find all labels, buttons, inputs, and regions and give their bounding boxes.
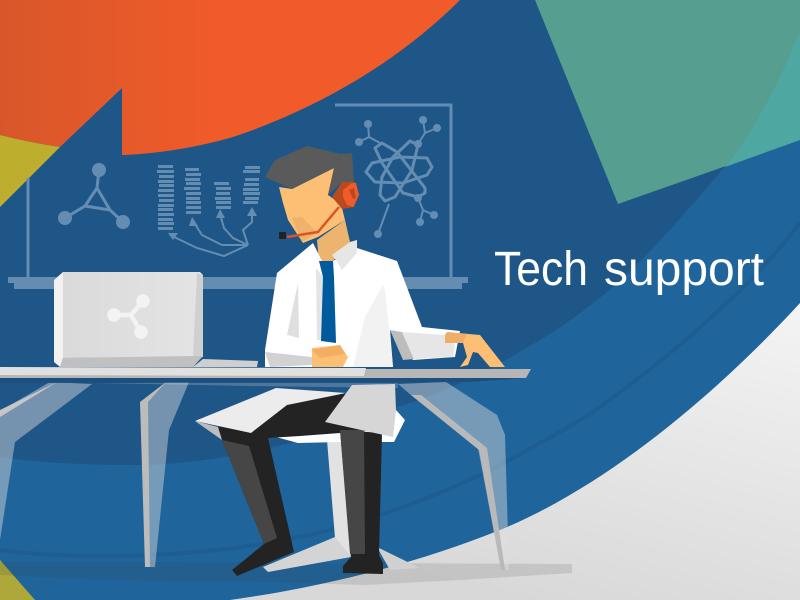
laptop lid (63, 272, 203, 358)
left glass leg (0, 382, 92, 540)
collar (332, 240, 357, 270)
whiteboard frame (28, 105, 451, 278)
whiteboard shelf (8, 277, 468, 289)
floor shadow (0, 562, 572, 585)
coat right panel (353, 285, 393, 367)
headset (279, 182, 359, 239)
heading: Tech (494, 243, 588, 296)
left leg strip (0, 382, 57, 417)
trousers right leg (340, 430, 383, 574)
chair (263, 410, 420, 572)
face (279, 168, 345, 243)
coat tail front (195, 388, 346, 433)
neck (317, 220, 350, 262)
shirt (316, 268, 323, 340)
person (195, 146, 505, 576)
laptop base (193, 359, 258, 367)
chair seat (276, 410, 405, 443)
laptop (54, 272, 258, 367)
thigh (218, 393, 380, 438)
desk shadow (0, 378, 526, 383)
hair (265, 146, 354, 195)
chair stem (327, 440, 351, 557)
share icon (110, 296, 148, 336)
teal shape (535, 0, 800, 204)
atom diagram (355, 116, 441, 238)
heading: support (604, 243, 764, 296)
yellow shape bottom (0, 560, 35, 600)
left sleeve underside (265, 352, 312, 367)
trousers left leg (218, 427, 294, 576)
laptop lower strip (60, 356, 203, 367)
mic arm (287, 207, 339, 237)
tie (319, 261, 336, 343)
orange shape (0, 0, 460, 155)
mic (279, 232, 286, 239)
left hand (312, 345, 348, 367)
laptop side (54, 272, 63, 367)
chair base (263, 537, 351, 572)
white floor curve (230, 303, 800, 600)
whiteboard (8, 105, 468, 289)
right leg highlight (340, 430, 365, 554)
coat tail back (325, 384, 396, 437)
yellow shape top (0, 135, 60, 207)
coat (265, 243, 460, 367)
left leg highlight (222, 440, 277, 544)
coat shadow (287, 283, 299, 338)
ear cup (332, 182, 359, 209)
desk top (0, 367, 531, 378)
bar columns (157, 165, 260, 230)
middle glass leg (146, 382, 189, 567)
molecule triangle (58, 163, 130, 229)
middle leg strip (140, 382, 166, 567)
background darker arc (0, 222, 800, 556)
background lighter blue band (0, 140, 800, 600)
sleeve (390, 330, 414, 360)
under desk glass strip (92, 383, 398, 388)
desk legs (0, 382, 509, 570)
tree arrows (168, 207, 257, 256)
right leg strip (411, 395, 505, 570)
right hand (445, 332, 505, 367)
right glass leg (398, 382, 509, 570)
